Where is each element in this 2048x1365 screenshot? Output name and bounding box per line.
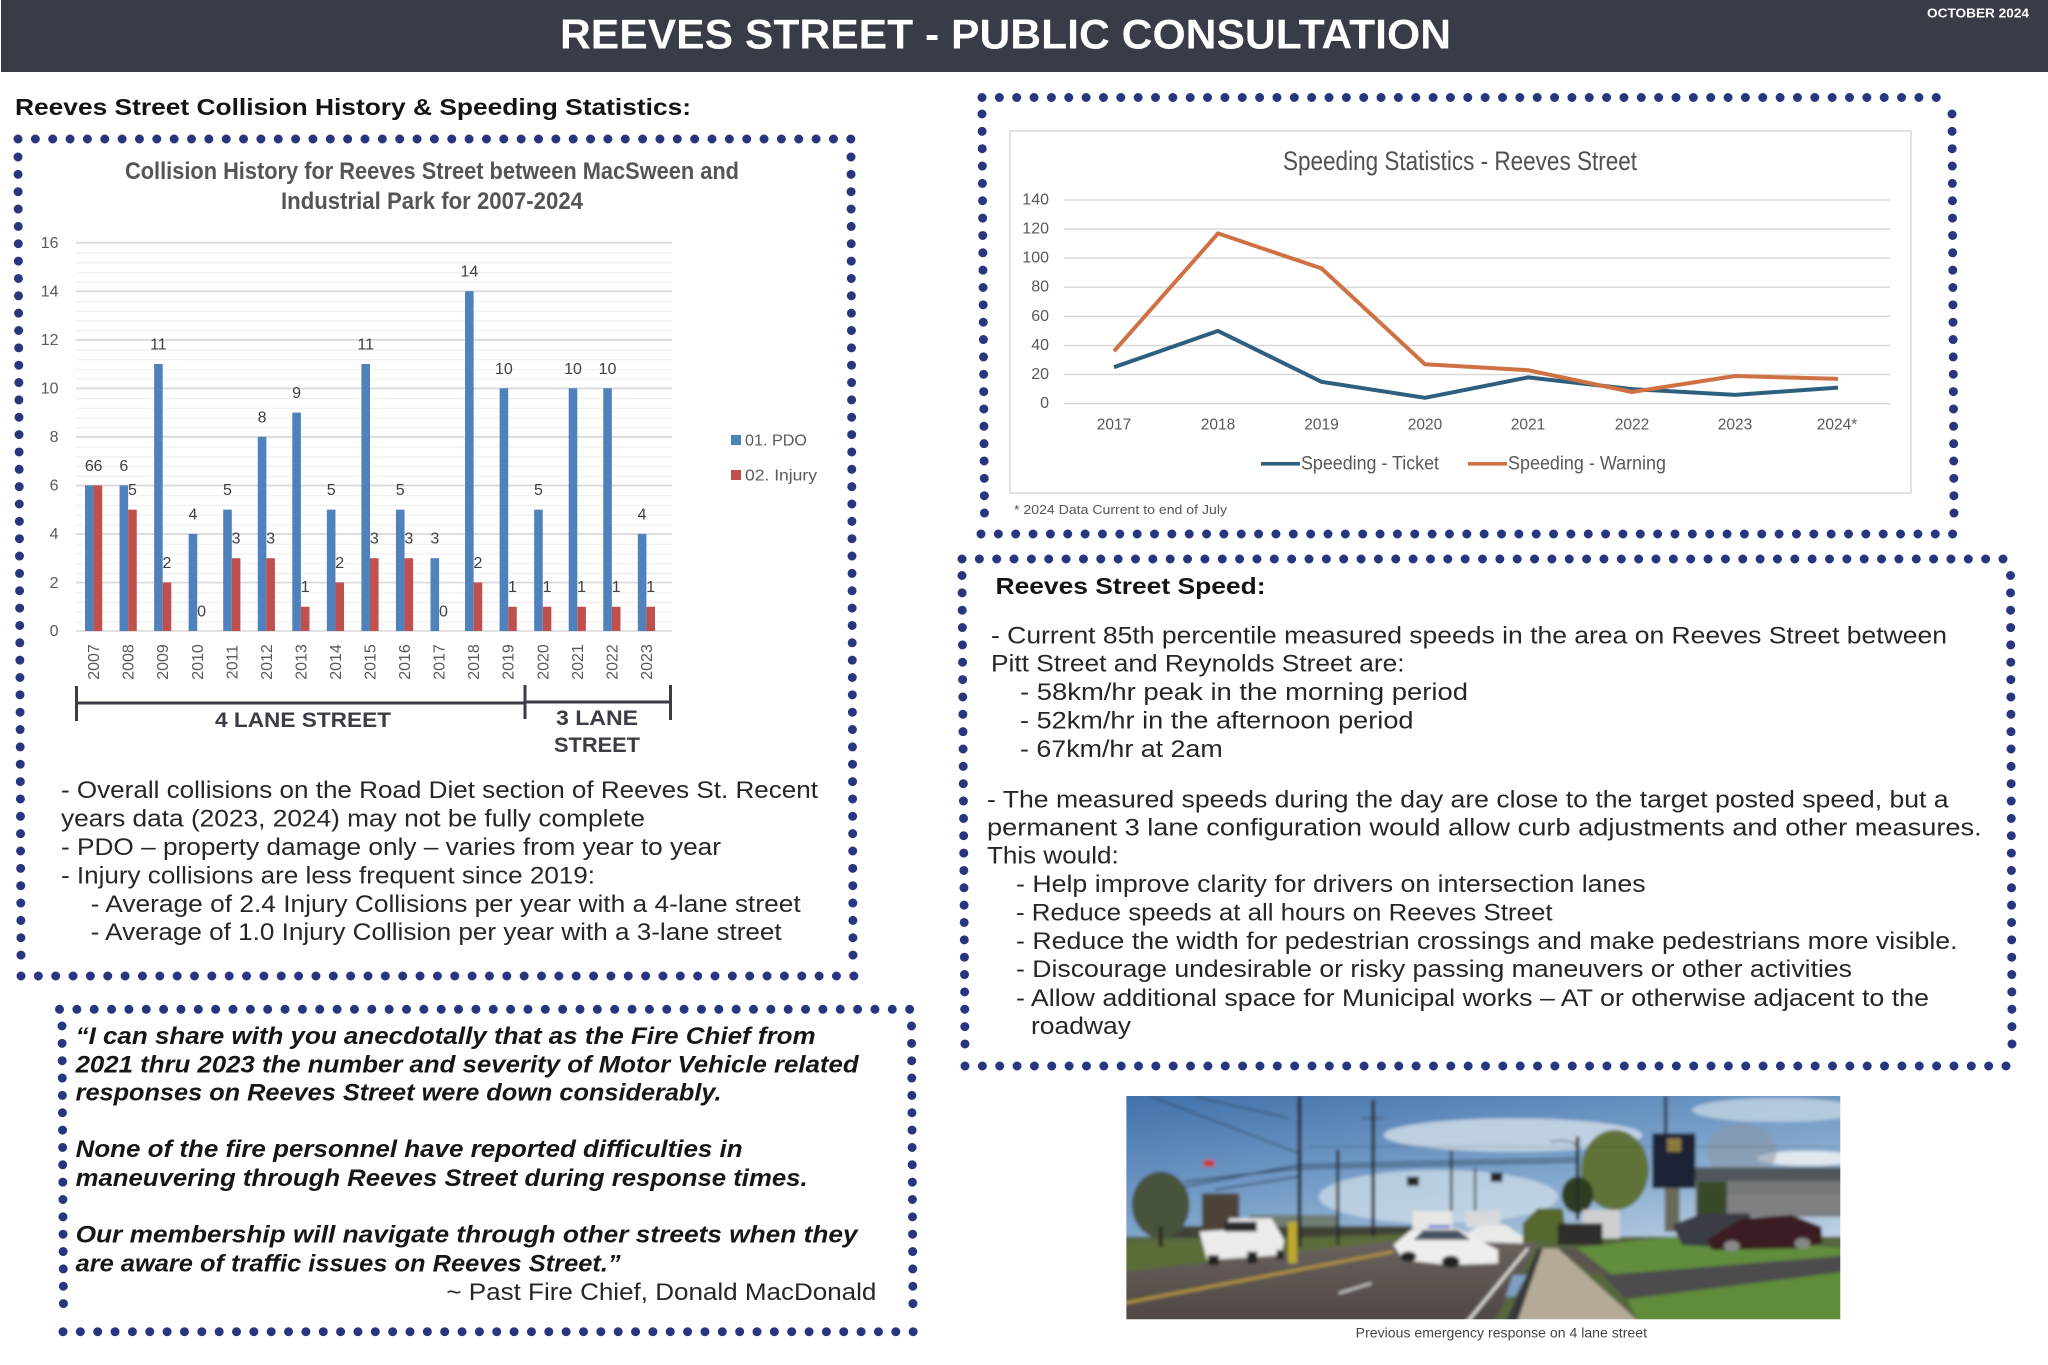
chart legend: 02. Injury	[745, 468, 817, 484]
y axis labels: 100	[1022, 250, 1049, 266]
year axis labels: 2008	[121, 644, 138, 680]
panel: reeves street speed	[962, 559, 2014, 1066]
PDO data labels: 3	[430, 531, 439, 548]
footnote: * 2024 Data Current to end of July	[1014, 502, 1228, 517]
collision notes: years data (2023, 2024) may not be fully complete	[61, 805, 645, 832]
PDO data labels: 4	[638, 506, 647, 524]
x axis labels: 2023	[1718, 416, 1752, 434]
y axis labels: 80	[1031, 278, 1049, 296]
y axis labels: 10	[41, 380, 59, 398]
measured speeds list: - 52km/hr in the afternoon period	[1020, 707, 1414, 734]
injury data labels: 5	[128, 482, 137, 499]
line chart legend: Speeding - Warning	[1508, 454, 1666, 474]
year axis labels: 2010	[190, 644, 207, 680]
year axis labels: 2015	[362, 644, 380, 680]
PDO data labels: 5	[223, 482, 232, 499]
measured speeds list: - Current 85th percentile measured speeds in the area on Reeves Street between	[991, 622, 1947, 649]
y axis labels: 140	[1022, 192, 1049, 208]
year axis labels	[86, 644, 656, 680]
injury data labels: 0	[439, 604, 448, 620]
year axis labels: 2013	[293, 644, 310, 680]
year axis labels: 2009	[155, 644, 172, 680]
configuration benefits list: - Help improve clarity for drivers on intersection lanes	[1016, 871, 1646, 898]
year axis labels: 2012	[259, 644, 276, 680]
measured speeds list	[991, 622, 1947, 763]
line chart legend: Speeding - Ticket	[1301, 454, 1440, 474]
panel: speeding statistics	[981, 98, 1954, 534]
year axis labels: 2014	[328, 644, 345, 680]
PDO data labels: 5	[534, 482, 543, 499]
PDO data labels: 6	[119, 458, 128, 475]
x axis labels: 2020	[1408, 416, 1443, 434]
injury data labels: 3	[404, 531, 413, 548]
injury data labels: 3	[370, 531, 379, 548]
configuration benefits list: permanent 3 lane configuration would allow curb adjustments and other measures.	[987, 814, 1982, 842]
x axis labels: 2021	[1511, 416, 1545, 434]
measured speeds list: - 67km/hr at 2am	[1020, 736, 1223, 763]
PDO data labels: 10	[495, 361, 513, 378]
year axis labels: 2023	[639, 644, 656, 680]
building and sign	[1202, 1133, 1845, 1232]
configuration benefits list: - Reduce the width for pedestrian crossings and make pedestrians more visible.	[1016, 928, 1958, 955]
quote text: None of the fire personnel have reported difficulties in	[76, 1136, 743, 1163]
quote text: 2021 thru 2023 the number and severity of Motor Vehicle related	[75, 1051, 860, 1078]
injury data labels: 2	[473, 555, 482, 572]
y axis labels: 0	[1040, 395, 1049, 412]
collision notes: - Injury collisions are less frequent since 2019:	[61, 863, 595, 890]
configuration benefits list	[987, 787, 1982, 1040]
line chart legend	[1261, 454, 1666, 474]
measured speeds list: Pitt Street and Reynolds Street are:	[991, 650, 1404, 678]
y axis labels: 14	[41, 284, 59, 300]
year axis labels: 2021	[570, 644, 587, 680]
x axis labels: 2018	[1201, 416, 1235, 434]
configuration benefits list: roadway	[1031, 1013, 1131, 1040]
PDO data labels: 11	[150, 336, 167, 354]
collision chart title: Industrial Park for 2007-2024	[281, 188, 584, 215]
year axis labels: 2019	[501, 644, 518, 680]
panel: collision history	[18, 139, 854, 976]
parked cars	[1672, 1213, 1822, 1251]
y axis labels: 0	[50, 623, 59, 640]
y axis labels: 40	[1031, 337, 1049, 354]
y axis labels: 20	[1031, 366, 1049, 383]
configuration benefits list: - The measured speeds during the day are close to the target posted speed, but a	[987, 787, 1949, 814]
line chart title: Speeding Statistics - Reeves Street	[1283, 146, 1637, 176]
speed heading: Reeves Street Speed:	[996, 573, 1266, 599]
injury data labels	[93, 458, 655, 620]
injury data labels: 1	[612, 579, 621, 596]
panel: fire chief quote	[60, 1009, 916, 1332]
injury data labels: 3	[232, 531, 241, 548]
injury data labels: 2	[163, 555, 172, 572]
y axis labels: 120	[1022, 220, 1049, 238]
y axis labels	[41, 235, 59, 640]
x axis labels: 2024*	[1817, 416, 1857, 434]
x axis labels: 2017	[1097, 416, 1131, 434]
quote text: are aware of traffic issues on Reeves Street.”	[76, 1251, 621, 1278]
year axis labels: 2020	[535, 644, 552, 680]
y axis labels: 60	[1031, 308, 1049, 325]
PDO data labels: 6	[85, 458, 94, 475]
y axis labels: 8	[50, 429, 59, 446]
configuration benefits list: - Reduce speeds at all hours on Reeves Street	[1016, 900, 1553, 926]
injury data labels: 1	[301, 579, 310, 596]
year axis labels: 2018	[466, 644, 483, 680]
date label: OCTOBER 2024	[1927, 6, 2029, 20]
PDO data labels: 10	[564, 361, 582, 378]
injury data labels: 1	[577, 579, 586, 596]
injury data labels: 3	[266, 531, 275, 548]
y axis labels: 12	[41, 332, 59, 349]
configuration benefits list: - Discourage undesirable or risky passing maneuvers or other activities	[1016, 956, 1852, 983]
collision notes: - PDO – property damage only – varies from year to year	[61, 834, 721, 861]
PDO data labels: 14	[460, 264, 478, 281]
y axis labels: 6	[50, 478, 59, 494]
y axis labels: 2	[50, 575, 59, 592]
year axis labels: 2011	[224, 645, 241, 679]
quote text	[75, 1023, 860, 1278]
quote text: Our membership will navigate through other streets when they	[76, 1222, 859, 1249]
PDO data labels: 11	[357, 336, 374, 354]
chart legend: 01. PDO	[745, 432, 807, 450]
PDO bars	[85, 291, 646, 631]
PDO data labels: 9	[292, 385, 301, 402]
trees	[1132, 1123, 1777, 1247]
configuration benefits list: This would:	[987, 843, 1119, 870]
year axis labels: 2007	[86, 644, 103, 680]
ticket line	[1114, 331, 1838, 398]
injury data labels: 2	[335, 555, 344, 572]
section heading: Reeves Street Collision History & Speeding Statistics:	[15, 94, 691, 120]
x axis labels: 2019	[1304, 416, 1339, 434]
line chart: speeding tickets and warnings	[1022, 192, 1890, 434]
collision notes: - Average of 1.0 Injury Collision per year with a 3-lane street	[91, 919, 782, 946]
quote text: responses on Reeves Street were down considerably.	[76, 1080, 722, 1107]
collision notes: - Overall collisions on the Road Diet section of Reeves St. Recent	[61, 777, 818, 804]
injury bars	[94, 485, 655, 631]
collision chart title	[125, 158, 739, 215]
injury data labels: 1	[543, 579, 552, 596]
emergency vehicles	[1394, 1208, 1620, 1268]
x axis labels: 2022	[1615, 416, 1649, 434]
photo: emergency response on street	[1121, 1093, 1861, 1323]
injury data labels: 0	[197, 604, 206, 620]
y axis labels: 16	[41, 235, 59, 252]
page title: REEVES STREET - PUBLIC CONSULTATION	[560, 10, 1451, 58]
x axis labels	[1097, 416, 1857, 434]
PDO data labels	[85, 264, 647, 548]
injury data labels: 1	[508, 579, 517, 596]
PDO data labels: 10	[599, 361, 617, 378]
warning line	[1114, 233, 1838, 392]
y axis labels	[1022, 192, 1049, 412]
pickup truck and firefighter	[1200, 1218, 1297, 1265]
3 lane label: STREET	[554, 734, 640, 757]
3 lane label	[554, 707, 640, 757]
y axis labels: 4	[50, 526, 59, 543]
header banner	[1, 0, 2048, 72]
collision notes	[61, 777, 818, 946]
poles and wires	[1150, 1096, 1840, 1247]
year axis labels: 2022	[604, 644, 621, 680]
bar chart: collisions by year	[41, 235, 672, 680]
4 lane label: 4 LANE STREET	[215, 709, 391, 732]
collision notes: - Average of 2.4 Injury Collisions per year with a 4-lane street	[91, 891, 801, 918]
PDO data labels: 8	[258, 409, 267, 426]
collision chart title: Collision History for Reeves Street between MacSween and	[125, 158, 739, 185]
photo caption: Previous emergency response on 4 lane street	[1356, 1326, 1647, 1341]
quote text: maneuvering through Reeves Street during response times.	[76, 1165, 808, 1192]
year axis labels: 2017	[432, 644, 449, 680]
injury data labels: 6	[93, 458, 102, 475]
lane configuration brackets	[76, 685, 670, 757]
line chart frame	[1010, 131, 1911, 493]
measured speeds list: - 58km/hr peak in the morning period	[1020, 679, 1468, 706]
PDO data labels: 5	[396, 482, 405, 499]
PDO data labels: 4	[188, 506, 197, 524]
quote attribution: ~ Past Fire Chief, Donald MacDonald	[446, 1279, 876, 1306]
year axis labels: 2016	[397, 644, 414, 680]
PDO data labels: 5	[327, 482, 336, 499]
3 lane label: 3 LANE	[556, 707, 638, 730]
configuration benefits list: - Allow additional space for Municipal works – AT or otherwise adjacent to the	[1016, 985, 1929, 1012]
injury data labels: 1	[646, 579, 655, 596]
chart legend	[731, 432, 817, 484]
quote text: “I can share with you anecdotally that as the Fire Chief from	[76, 1023, 816, 1050]
